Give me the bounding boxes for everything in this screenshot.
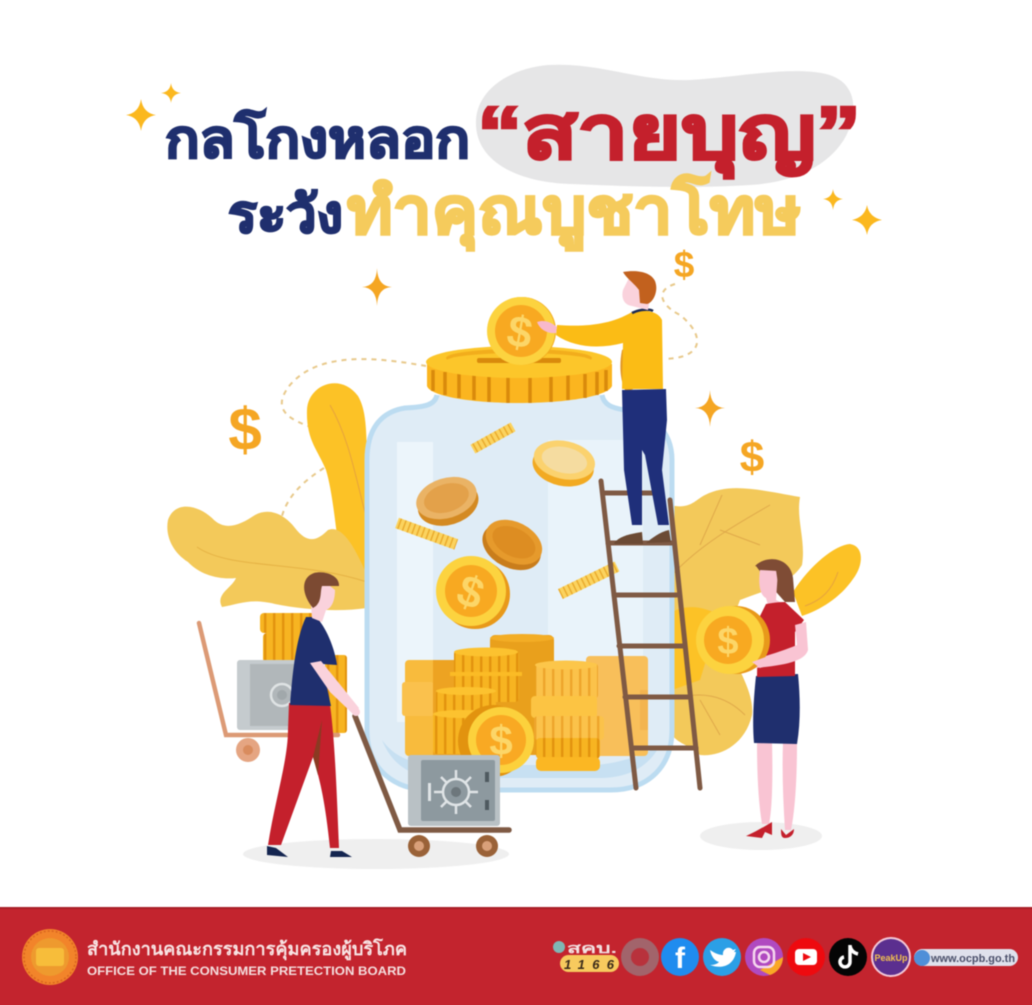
ground shadows xyxy=(243,822,822,869)
footer Thai name: สำนักงานคณะกรรมการคุ้มครองผู้บริโภค xyxy=(87,938,407,961)
coin entering lid xyxy=(487,297,556,365)
falling coin 1 xyxy=(411,470,484,533)
held coin xyxy=(696,606,770,674)
cart xyxy=(355,716,509,857)
man shadow xyxy=(243,839,509,869)
plants behind jar xyxy=(167,383,861,755)
logo: hotline 1166 xyxy=(553,940,619,972)
footer band xyxy=(0,907,1032,1005)
neck and head xyxy=(311,578,335,622)
dollar right: $ xyxy=(740,433,764,482)
logo: hotline 1166: 1166 xyxy=(564,957,615,972)
head xyxy=(622,276,652,310)
icon: instagram xyxy=(745,938,783,976)
shoes xyxy=(746,822,772,838)
icon: facebook: f xyxy=(675,942,686,975)
coin entering lid: $ xyxy=(503,306,536,359)
url pill xyxy=(914,949,1018,966)
big coin in stack: $ xyxy=(489,717,513,764)
footer background xyxy=(0,907,1032,1005)
tall leaf xyxy=(307,383,368,600)
pants xyxy=(268,703,339,848)
title highlight blob xyxy=(476,65,853,187)
title block xyxy=(165,65,861,251)
icon: twitter xyxy=(703,938,741,976)
falling coin 3 xyxy=(474,510,551,579)
falling coin 4: $ xyxy=(451,565,490,620)
hair top xyxy=(755,560,783,584)
dashed trails xyxy=(282,284,697,516)
lid side xyxy=(427,364,612,403)
shirt xyxy=(757,602,804,677)
logo: hotline 1166: สคบ. xyxy=(567,940,617,956)
jar lid xyxy=(426,346,612,403)
ladder xyxy=(601,481,700,788)
hair xyxy=(623,271,656,304)
coin sticks xyxy=(470,422,516,454)
mid stack xyxy=(454,650,519,702)
torso xyxy=(556,311,663,389)
dollar top right: $ xyxy=(674,244,695,285)
small right leaf xyxy=(793,544,861,616)
arm xyxy=(752,622,808,668)
icon: tiktok xyxy=(829,938,867,976)
sparkle 6 xyxy=(695,390,725,427)
back stack xyxy=(490,635,554,755)
icon: peak: PeakUp xyxy=(874,953,908,963)
footer English name: OFFICE OF THE CONSUMER PRETECTION BOARD xyxy=(87,966,406,978)
woman xyxy=(696,559,808,838)
woman shadow xyxy=(700,822,822,850)
wide leaf xyxy=(167,507,367,610)
icon: facebook xyxy=(661,938,699,976)
emblem xyxy=(22,929,78,985)
sparkle 1 xyxy=(126,99,156,131)
glass jar xyxy=(367,395,672,790)
hand xyxy=(352,708,360,716)
pale right stack xyxy=(586,656,648,756)
faded cart in background xyxy=(199,613,347,762)
big right leaf xyxy=(670,488,803,755)
man with cart xyxy=(267,572,509,857)
title line 1 red: “สายบุญ” xyxy=(477,91,861,179)
url pill: www.ocpb.go.th xyxy=(930,953,1015,965)
held coin: $ xyxy=(717,621,739,663)
sparkle 2 xyxy=(161,83,181,103)
falling coin 2 xyxy=(529,435,599,492)
faded coins xyxy=(260,613,320,633)
sparkle 5 xyxy=(362,268,392,306)
shoes xyxy=(267,846,288,857)
rungs xyxy=(603,493,696,748)
pale left stack xyxy=(405,660,463,756)
wheels xyxy=(408,835,430,857)
title line 1 navy: กลโกงหลอก xyxy=(165,108,470,169)
sparkles xyxy=(126,83,882,427)
back arm xyxy=(620,340,640,392)
safe xyxy=(408,755,500,826)
cart handle xyxy=(355,716,509,830)
skirt xyxy=(753,674,800,744)
legs xyxy=(757,742,772,824)
face xyxy=(759,570,780,605)
hair xyxy=(304,572,339,608)
icon: peak xyxy=(872,938,910,976)
hand over coin xyxy=(752,648,795,668)
rails xyxy=(601,481,700,788)
big coin in stack xyxy=(458,705,534,777)
title line 2 navy: ระวัง xyxy=(228,186,343,244)
faded cart frame xyxy=(199,623,338,735)
hand xyxy=(537,321,557,333)
icon: youtube xyxy=(787,938,825,976)
faded safe xyxy=(237,660,305,730)
jar coin stacks xyxy=(402,634,648,777)
sparkle 4 xyxy=(852,205,882,235)
shirt xyxy=(290,617,337,706)
dollar left: $ xyxy=(228,396,262,463)
shoes xyxy=(614,532,643,544)
lid top xyxy=(426,346,612,378)
man on ladder xyxy=(537,271,671,544)
falling coins xyxy=(395,422,619,629)
right stack xyxy=(536,663,598,699)
falling coin 4 xyxy=(436,556,510,629)
icon: round seal xyxy=(621,938,659,976)
jar body xyxy=(367,395,672,790)
arm xyxy=(310,661,359,715)
hair back xyxy=(756,559,795,602)
sparkle 3 xyxy=(823,189,843,210)
pants xyxy=(622,389,669,525)
jar highlights xyxy=(397,442,433,722)
dollar signs xyxy=(228,244,764,482)
title line 2 yellow: ทำคุณบูชาโทษ xyxy=(347,173,801,251)
